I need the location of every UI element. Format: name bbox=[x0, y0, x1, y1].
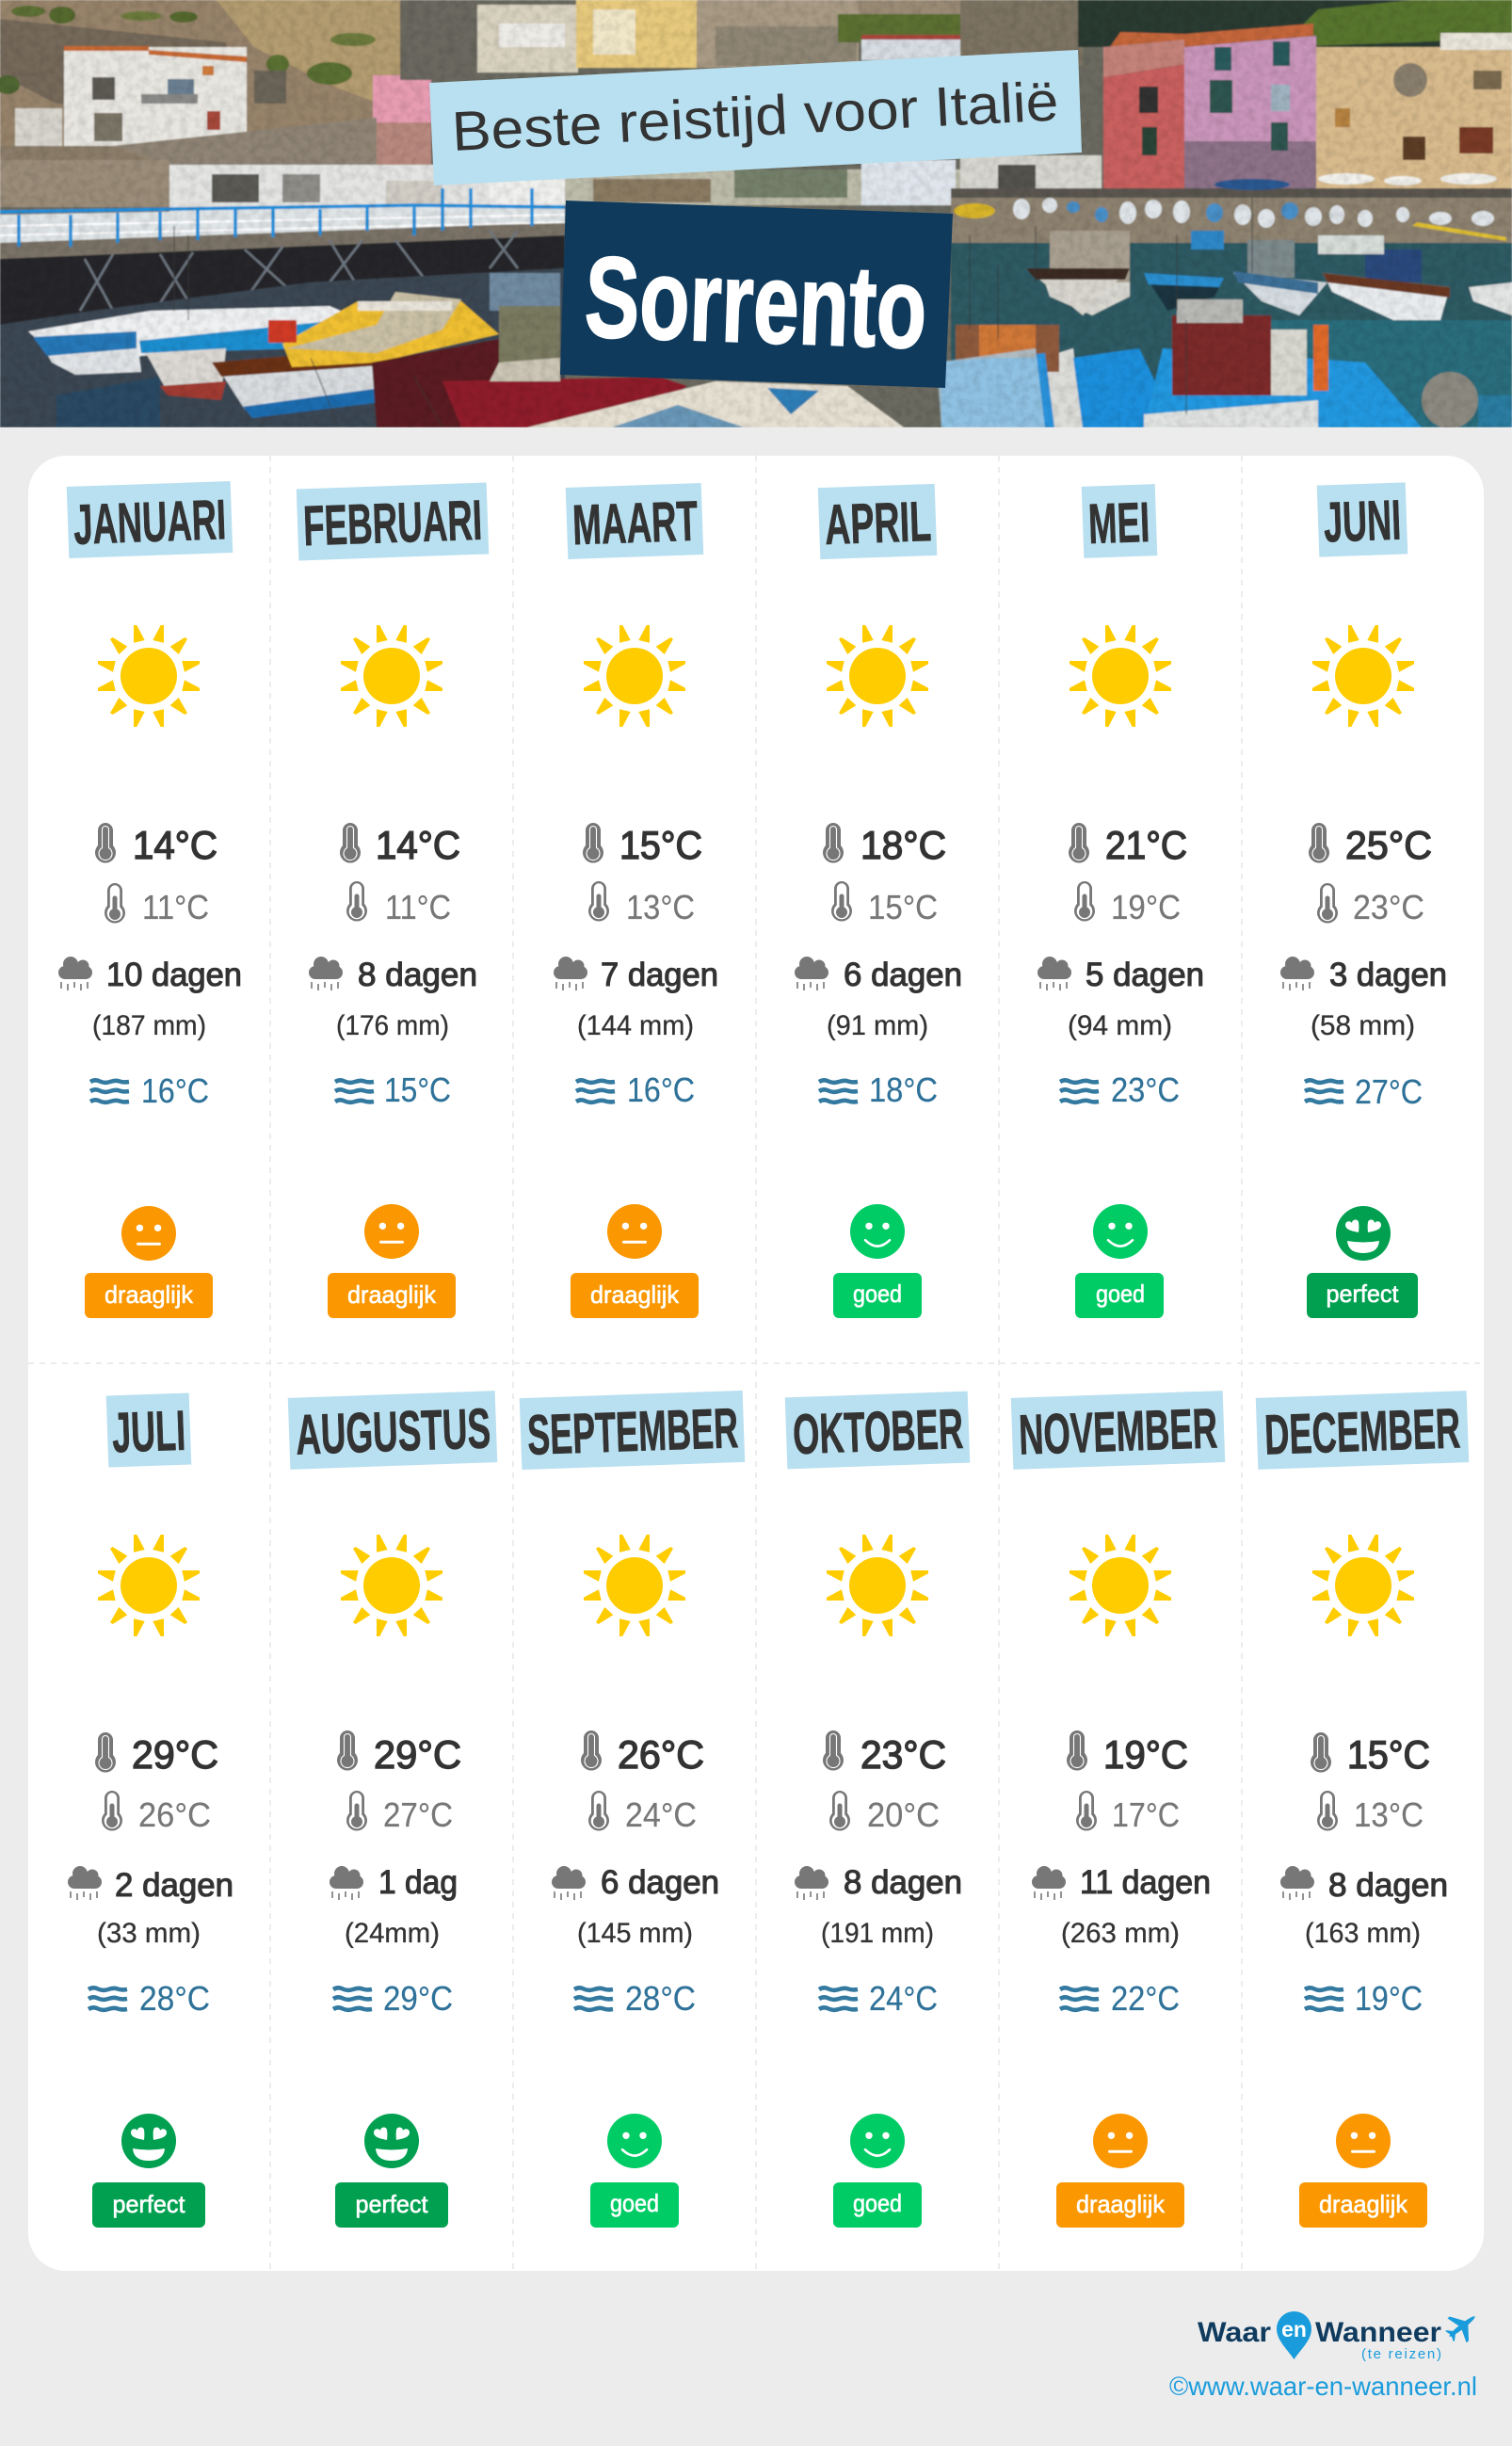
month heading bbox=[566, 483, 703, 559]
icon: sun bbox=[341, 1535, 442, 1636]
title banner: Beste reistijd voor Italië bbox=[429, 50, 1082, 185]
icon: waves bbox=[576, 1080, 615, 1102]
max temperature: 14°C bbox=[376, 823, 460, 867]
month heading bbox=[297, 482, 489, 561]
rating: draaglijk: draaglijk bbox=[1319, 2190, 1408, 2218]
rating: goed: goed bbox=[610, 2189, 659, 2217]
rain days: 3 dagen bbox=[1329, 957, 1447, 993]
icon: rain bbox=[68, 1866, 102, 1900]
rain days: 8 dagen bbox=[844, 1864, 962, 1901]
icon: waves bbox=[1060, 1987, 1099, 2010]
rating: goed bbox=[833, 1273, 922, 1318]
icon: sun bbox=[1070, 625, 1171, 727]
rating: perfect bbox=[92, 2182, 205, 2228]
max temperature: 15°C bbox=[1347, 1732, 1430, 1777]
rainfall: (24mm) bbox=[345, 1918, 440, 1949]
logo: Waar en Wanneer: Wanneer bbox=[1315, 2317, 1441, 2348]
month heading bbox=[67, 481, 233, 558]
month: januari bbox=[58, 481, 242, 1318]
min temperature: 13°C bbox=[1354, 1795, 1424, 1834]
month: december bbox=[1256, 1391, 1469, 2228]
rating: goed: goed bbox=[853, 2189, 902, 2217]
destination banner: Sorrento: Sorrento bbox=[583, 233, 929, 373]
rating: perfect bbox=[335, 2182, 448, 2228]
max temperature: 29°C bbox=[132, 1732, 218, 1777]
sea temperature: 16°C bbox=[627, 1070, 695, 1109]
rain days: 6 dagen bbox=[601, 1864, 719, 1901]
icon: perfect face bbox=[364, 2114, 419, 2168]
rating: draaglijk bbox=[571, 1273, 699, 1318]
rating: goed bbox=[590, 2182, 679, 2228]
left boats bbox=[27, 305, 342, 358]
sea temperature: 22°C bbox=[1111, 1979, 1180, 2018]
icon: neutral face bbox=[121, 1206, 176, 1261]
rating: perfect: perfect bbox=[1326, 1279, 1399, 1308]
icon: sun bbox=[98, 1535, 200, 1636]
icon: perfect face bbox=[1336, 1206, 1391, 1261]
icon: min temperature bbox=[102, 1791, 122, 1831]
max temperature: 18°C bbox=[861, 823, 946, 867]
rain days: 10 dagen bbox=[106, 957, 242, 993]
min temperature: 20°C bbox=[867, 1795, 940, 1834]
icon: waves bbox=[88, 1987, 127, 2010]
icon: max temperature bbox=[823, 1730, 844, 1771]
rainfall: (191 mm) bbox=[821, 1918, 934, 1949]
month heading: FEBRUARI bbox=[302, 489, 483, 557]
icon: max temperature bbox=[1067, 1730, 1087, 1771]
max temperature: 29°C bbox=[374, 1732, 461, 1777]
rating: draaglijk: draaglijk bbox=[347, 1280, 437, 1309]
month: augustus bbox=[288, 1391, 497, 2228]
water right bbox=[951, 242, 1512, 382]
icon: sun bbox=[827, 625, 928, 727]
title banner: Beste reistijd voor Italië: Beste reistijd voor Italië bbox=[450, 70, 1060, 163]
month: oktober bbox=[785, 1392, 970, 2228]
rainfall: (58 mm) bbox=[1311, 1010, 1415, 1041]
min temperature: 27°C bbox=[383, 1795, 453, 1834]
icon: max temperature bbox=[340, 823, 361, 863]
sea temperature: 15°C bbox=[384, 1070, 451, 1109]
mid building band bbox=[960, 155, 1102, 193]
rating: draaglijk: draaglijk bbox=[105, 1280, 194, 1309]
icon: map pin: en bbox=[1281, 2317, 1307, 2341]
rain days: 8 dagen bbox=[1328, 1867, 1448, 1904]
rainfall: (94 mm) bbox=[1068, 1010, 1172, 1041]
icon: max temperature bbox=[95, 823, 116, 863]
icon: min temperature bbox=[346, 881, 367, 922]
min temperature: 13°C bbox=[626, 888, 695, 926]
icon: min temperature bbox=[105, 883, 125, 924]
beige building bbox=[1316, 47, 1512, 188]
rating: goed: goed bbox=[1096, 1279, 1145, 1308]
icon: min temperature bbox=[1317, 1791, 1338, 1831]
icon: min temperature bbox=[1076, 1791, 1097, 1831]
month heading bbox=[520, 1391, 745, 1470]
logo: Waar en Wanneer: Waar bbox=[1198, 2317, 1271, 2348]
max temperature: 14°C bbox=[133, 823, 217, 867]
beach with small boats bbox=[951, 198, 1512, 249]
max temperature: 21°C bbox=[1105, 823, 1187, 867]
icon: rain bbox=[795, 1866, 828, 1900]
month heading bbox=[818, 484, 937, 559]
min temperature: 17°C bbox=[1112, 1795, 1180, 1834]
icon: sun bbox=[1312, 625, 1414, 727]
month heading bbox=[1011, 1391, 1225, 1470]
water left bbox=[0, 268, 565, 427]
icon: rain bbox=[1037, 957, 1071, 990]
month: november bbox=[1011, 1391, 1225, 2228]
month heading: JULI bbox=[111, 1399, 186, 1464]
rain days: 6 dagen bbox=[844, 957, 962, 993]
icon: waves bbox=[1305, 1987, 1343, 2010]
town buildings top bbox=[399, 0, 432, 81]
rating: draaglijk bbox=[1299, 2182, 1427, 2228]
pier bbox=[0, 204, 565, 244]
icon: sun bbox=[1070, 1535, 1171, 1636]
rainfall: (187 mm) bbox=[92, 1010, 206, 1041]
icon: min temperature bbox=[346, 1791, 367, 1831]
icon: rain bbox=[554, 957, 587, 990]
white panel: month grid bbox=[28, 456, 1484, 2271]
icon: neutral face bbox=[607, 1204, 662, 1259]
rating: draaglijk: draaglijk bbox=[1076, 2190, 1166, 2218]
rating: goed bbox=[833, 2182, 922, 2228]
rating: draaglijk bbox=[85, 1273, 213, 1318]
icon: rain bbox=[1032, 1866, 1066, 1900]
icon: waves bbox=[1305, 1080, 1343, 1102]
icon: perfect face bbox=[121, 2114, 176, 2168]
icon: min temperature bbox=[831, 881, 852, 922]
month: februari bbox=[297, 482, 489, 1318]
icon: map pin bbox=[1277, 2311, 1311, 2359]
icon: min temperature bbox=[588, 881, 609, 922]
icon: min temperature bbox=[829, 1791, 850, 1831]
icon: waves bbox=[819, 1080, 858, 1102]
icon: max temperature bbox=[1309, 823, 1329, 863]
icon: neutral face bbox=[1093, 2114, 1148, 2168]
icon: waves bbox=[574, 1987, 613, 2010]
icon: happy face bbox=[850, 2114, 905, 2168]
icon: min temperature bbox=[1074, 881, 1095, 922]
icon: max temperature bbox=[1069, 823, 1089, 863]
icon: happy face bbox=[607, 2114, 662, 2168]
icon: happy face bbox=[850, 1204, 905, 1259]
sea temperature: 29°C bbox=[383, 1979, 453, 2018]
website credit: ©www.waar-en-wanneer.nl bbox=[1169, 2372, 1477, 2401]
month: juli bbox=[68, 1392, 233, 2228]
rainfall: (263 mm) bbox=[1061, 1918, 1180, 1949]
icon: neutral face bbox=[364, 1204, 419, 1259]
photo grain bbox=[0, 0, 1512, 427]
white house bbox=[64, 47, 247, 146]
icon: rain bbox=[58, 957, 92, 990]
icon: min temperature bbox=[588, 1791, 609, 1831]
rainfall: (145 mm) bbox=[577, 1918, 693, 1949]
rating: perfect bbox=[1307, 1273, 1418, 1318]
center right boats bbox=[1046, 347, 1085, 427]
bottom right blue boat bbox=[1072, 347, 1156, 427]
max temperature: 26°C bbox=[618, 1732, 704, 1777]
min temperature: 24°C bbox=[625, 1795, 697, 1834]
rainfall: (33 mm) bbox=[97, 1918, 201, 1949]
header photo: Sorrento harbour bbox=[0, 0, 1512, 428]
max temperature: 23°C bbox=[861, 1732, 946, 1777]
month heading: MAART bbox=[571, 490, 699, 556]
icon: max temperature bbox=[583, 823, 603, 863]
rain days: 7 dagen bbox=[601, 957, 718, 993]
max temperature: 25°C bbox=[1345, 823, 1432, 867]
max temperature: 19°C bbox=[1103, 1732, 1188, 1777]
icon: rain bbox=[330, 1866, 363, 1900]
month heading: JUNI bbox=[1323, 489, 1402, 554]
destination banner: Sorrento bbox=[560, 201, 953, 388]
sea temperature: 16°C bbox=[141, 1071, 209, 1110]
rating: draaglijk bbox=[1056, 2182, 1184, 2228]
rating: draaglijk: draaglijk bbox=[590, 1280, 680, 1309]
rating: perfect: perfect bbox=[356, 2190, 428, 2218]
promenade & umbrellas bbox=[950, 187, 1512, 200]
min temperature: 15°C bbox=[868, 888, 938, 926]
month heading: APRIL bbox=[824, 490, 932, 556]
month heading: JANUARI bbox=[72, 488, 227, 556]
min temperature: 11°C bbox=[385, 888, 451, 926]
icon: max temperature bbox=[1311, 1732, 1331, 1773]
month heading: SEPTEMBER bbox=[526, 1396, 739, 1467]
month: maart bbox=[554, 483, 718, 1318]
rainfall: (144 mm) bbox=[577, 1010, 694, 1041]
month heading bbox=[785, 1392, 970, 1469]
icon: rain bbox=[552, 1866, 586, 1900]
rating: perfect: perfect bbox=[113, 2190, 185, 2218]
icon: neutral face bbox=[1336, 2114, 1391, 2168]
icon: airplane bbox=[1440, 2305, 1485, 2348]
month heading bbox=[1317, 482, 1407, 557]
sea temperature: 23°C bbox=[1111, 1070, 1180, 1109]
rating: draaglijk bbox=[328, 1273, 456, 1318]
icon: max temperature bbox=[95, 1732, 116, 1773]
pink house bbox=[373, 75, 431, 122]
icon: sun bbox=[584, 625, 685, 727]
dark hill bbox=[1077, 0, 1440, 48]
min temperature: 11°C bbox=[142, 888, 209, 926]
month heading bbox=[288, 1391, 497, 1470]
rainfall: (91 mm) bbox=[827, 1010, 928, 1041]
month heading: AUGUSTUS bbox=[295, 1396, 491, 1467]
rainfall: (163 mm) bbox=[1305, 1918, 1421, 1949]
sea temperature: 28°C bbox=[625, 1979, 696, 2018]
sea temperature: 18°C bbox=[869, 1070, 938, 1109]
pink and red building bbox=[1103, 64, 1184, 193]
icon: waves bbox=[333, 1987, 372, 2010]
icon: min temperature bbox=[1317, 883, 1338, 924]
rating: goed bbox=[1075, 1273, 1164, 1318]
icon: max temperature bbox=[337, 1730, 358, 1771]
min temperature: 26°C bbox=[138, 1795, 211, 1834]
month: juni bbox=[1280, 482, 1447, 1318]
sea temperature: 28°C bbox=[139, 1979, 210, 2018]
icon: sun bbox=[1312, 1535, 1414, 1636]
icon: rain bbox=[309, 957, 343, 990]
month heading: NOVEMBER bbox=[1018, 1396, 1218, 1467]
sea temperature: 27°C bbox=[1355, 1072, 1423, 1111]
min temperature: 23°C bbox=[1353, 888, 1424, 926]
month: september bbox=[520, 1391, 745, 2228]
sea temperature: 24°C bbox=[869, 1979, 938, 2018]
icon: rain bbox=[1280, 1866, 1314, 1900]
logo: Waar en Wanneer bbox=[1198, 2305, 1485, 2362]
icon: sun bbox=[584, 1535, 685, 1636]
rain days: 5 dagen bbox=[1086, 957, 1204, 993]
sea temperature: 19°C bbox=[1355, 1979, 1423, 2018]
icon: max temperature bbox=[581, 1730, 602, 1771]
month heading bbox=[106, 1392, 191, 1468]
rain days: 1 dag bbox=[378, 1864, 458, 1901]
icon: waves bbox=[1060, 1080, 1099, 1102]
hillside bbox=[0, 0, 373, 160]
icon: waves bbox=[335, 1080, 374, 1102]
min temperature: 19°C bbox=[1111, 888, 1181, 926]
icon: sun bbox=[98, 625, 200, 727]
rain days: 11 dagen bbox=[1080, 1864, 1211, 1901]
icon: rain bbox=[795, 957, 828, 990]
logo: Waar en Wanneer: (te reizen) bbox=[1361, 2346, 1441, 2362]
rain days: 2 dagen bbox=[115, 1867, 233, 1904]
icon: waves bbox=[819, 1987, 858, 2010]
rain days: 8 dagen bbox=[358, 957, 477, 993]
icon: sun bbox=[341, 625, 442, 727]
icon: rain bbox=[1280, 957, 1314, 990]
max temperature: 15°C bbox=[619, 823, 702, 867]
icon: waves bbox=[90, 1080, 129, 1102]
month heading bbox=[1082, 484, 1157, 558]
month: april bbox=[795, 484, 962, 1318]
rating: goed: goed bbox=[853, 1279, 902, 1308]
month heading: OKTOBER bbox=[792, 1397, 964, 1466]
month: mei bbox=[1037, 484, 1204, 1318]
icon: max temperature bbox=[823, 823, 844, 863]
icon: happy face bbox=[1093, 1204, 1148, 1259]
icon: sun bbox=[827, 1535, 928, 1636]
steps bbox=[113, 118, 377, 165]
rainfall: (176 mm) bbox=[336, 1010, 449, 1041]
month heading: MEI bbox=[1087, 491, 1150, 555]
